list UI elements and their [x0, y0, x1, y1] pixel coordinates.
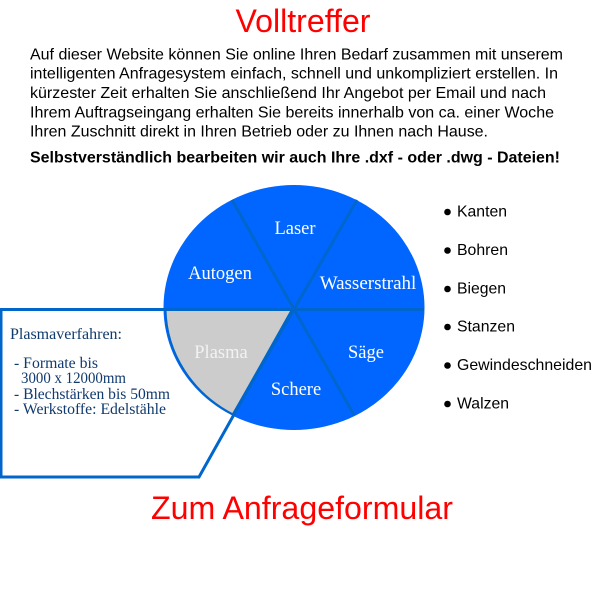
callout: Plasmaverfahren	[1, 310, 293, 477]
callout: Plasmaverfahren: Plasmaverfahren:	[10, 326, 122, 343]
bullet list: Kanten	[457, 204, 507, 220]
intro text block: Ihren Zuschnitt direkt in Ihren Betrieb oder zu Ihnen nach Hause.	[30, 124, 488, 140]
bullet list: Walzen	[457, 396, 509, 412]
segment label: Schere: Schere	[271, 380, 321, 400]
title: Volltreffer	[236, 3, 371, 39]
plasma segment	[166, 310, 292, 414]
intro text block: Ihrem Auftragseingang erhalten Sie bereits innerhalb von ca. einer Woche	[30, 104, 554, 122]
segment label: Laser: Laser	[274, 219, 316, 239]
bullet list: Bohren	[457, 242, 508, 259]
bullet list	[444, 204, 592, 412]
callout: Plasmaverfahren: - Formate bis	[14, 355, 98, 372]
callout: Plasmaverfahren: - Werkstoffe: Edelstähle	[14, 401, 166, 418]
intro text block	[30, 46, 563, 140]
bold note: Selbstverständlich bearbeiten wir auch Ihre .dxf - oder .dwg - Dateien!	[30, 150, 560, 166]
intro text block: Auf dieser Website können Sie online Ihren Bedarf zusammen mit unserem	[30, 46, 563, 64]
segment label: Säge: Säge	[348, 343, 384, 363]
bullet list: Gewindeschneiden	[457, 357, 592, 374]
bullet list: Stanzen	[457, 318, 515, 336]
link: Zum Anfrageformular: Zum Anfrageformular	[151, 490, 453, 526]
intro text block: kürzester Zeit erhalten Sie anschließend Ihr Angebot per Email und nach	[30, 85, 546, 102]
spokes	[164, 200, 424, 415]
bullet list: Biegen	[457, 280, 506, 298]
segment label: Autogen: Autogen	[188, 264, 252, 284]
segment label: Plasma: Plasma	[194, 343, 248, 363]
pie chart	[164, 185, 424, 430]
callout: Plasmaverfahren: 3000 x 12000mm	[21, 370, 127, 387]
segment label: Wasserstrahl: Wasserstrahl	[320, 273, 416, 294]
callout: Plasmaverfahren: - Blechstärken bis 50mm	[14, 386, 171, 403]
intro text block: intelligenten Anfragesystem einfach, schnell und unkompliziert erstellen. In	[30, 66, 558, 82]
